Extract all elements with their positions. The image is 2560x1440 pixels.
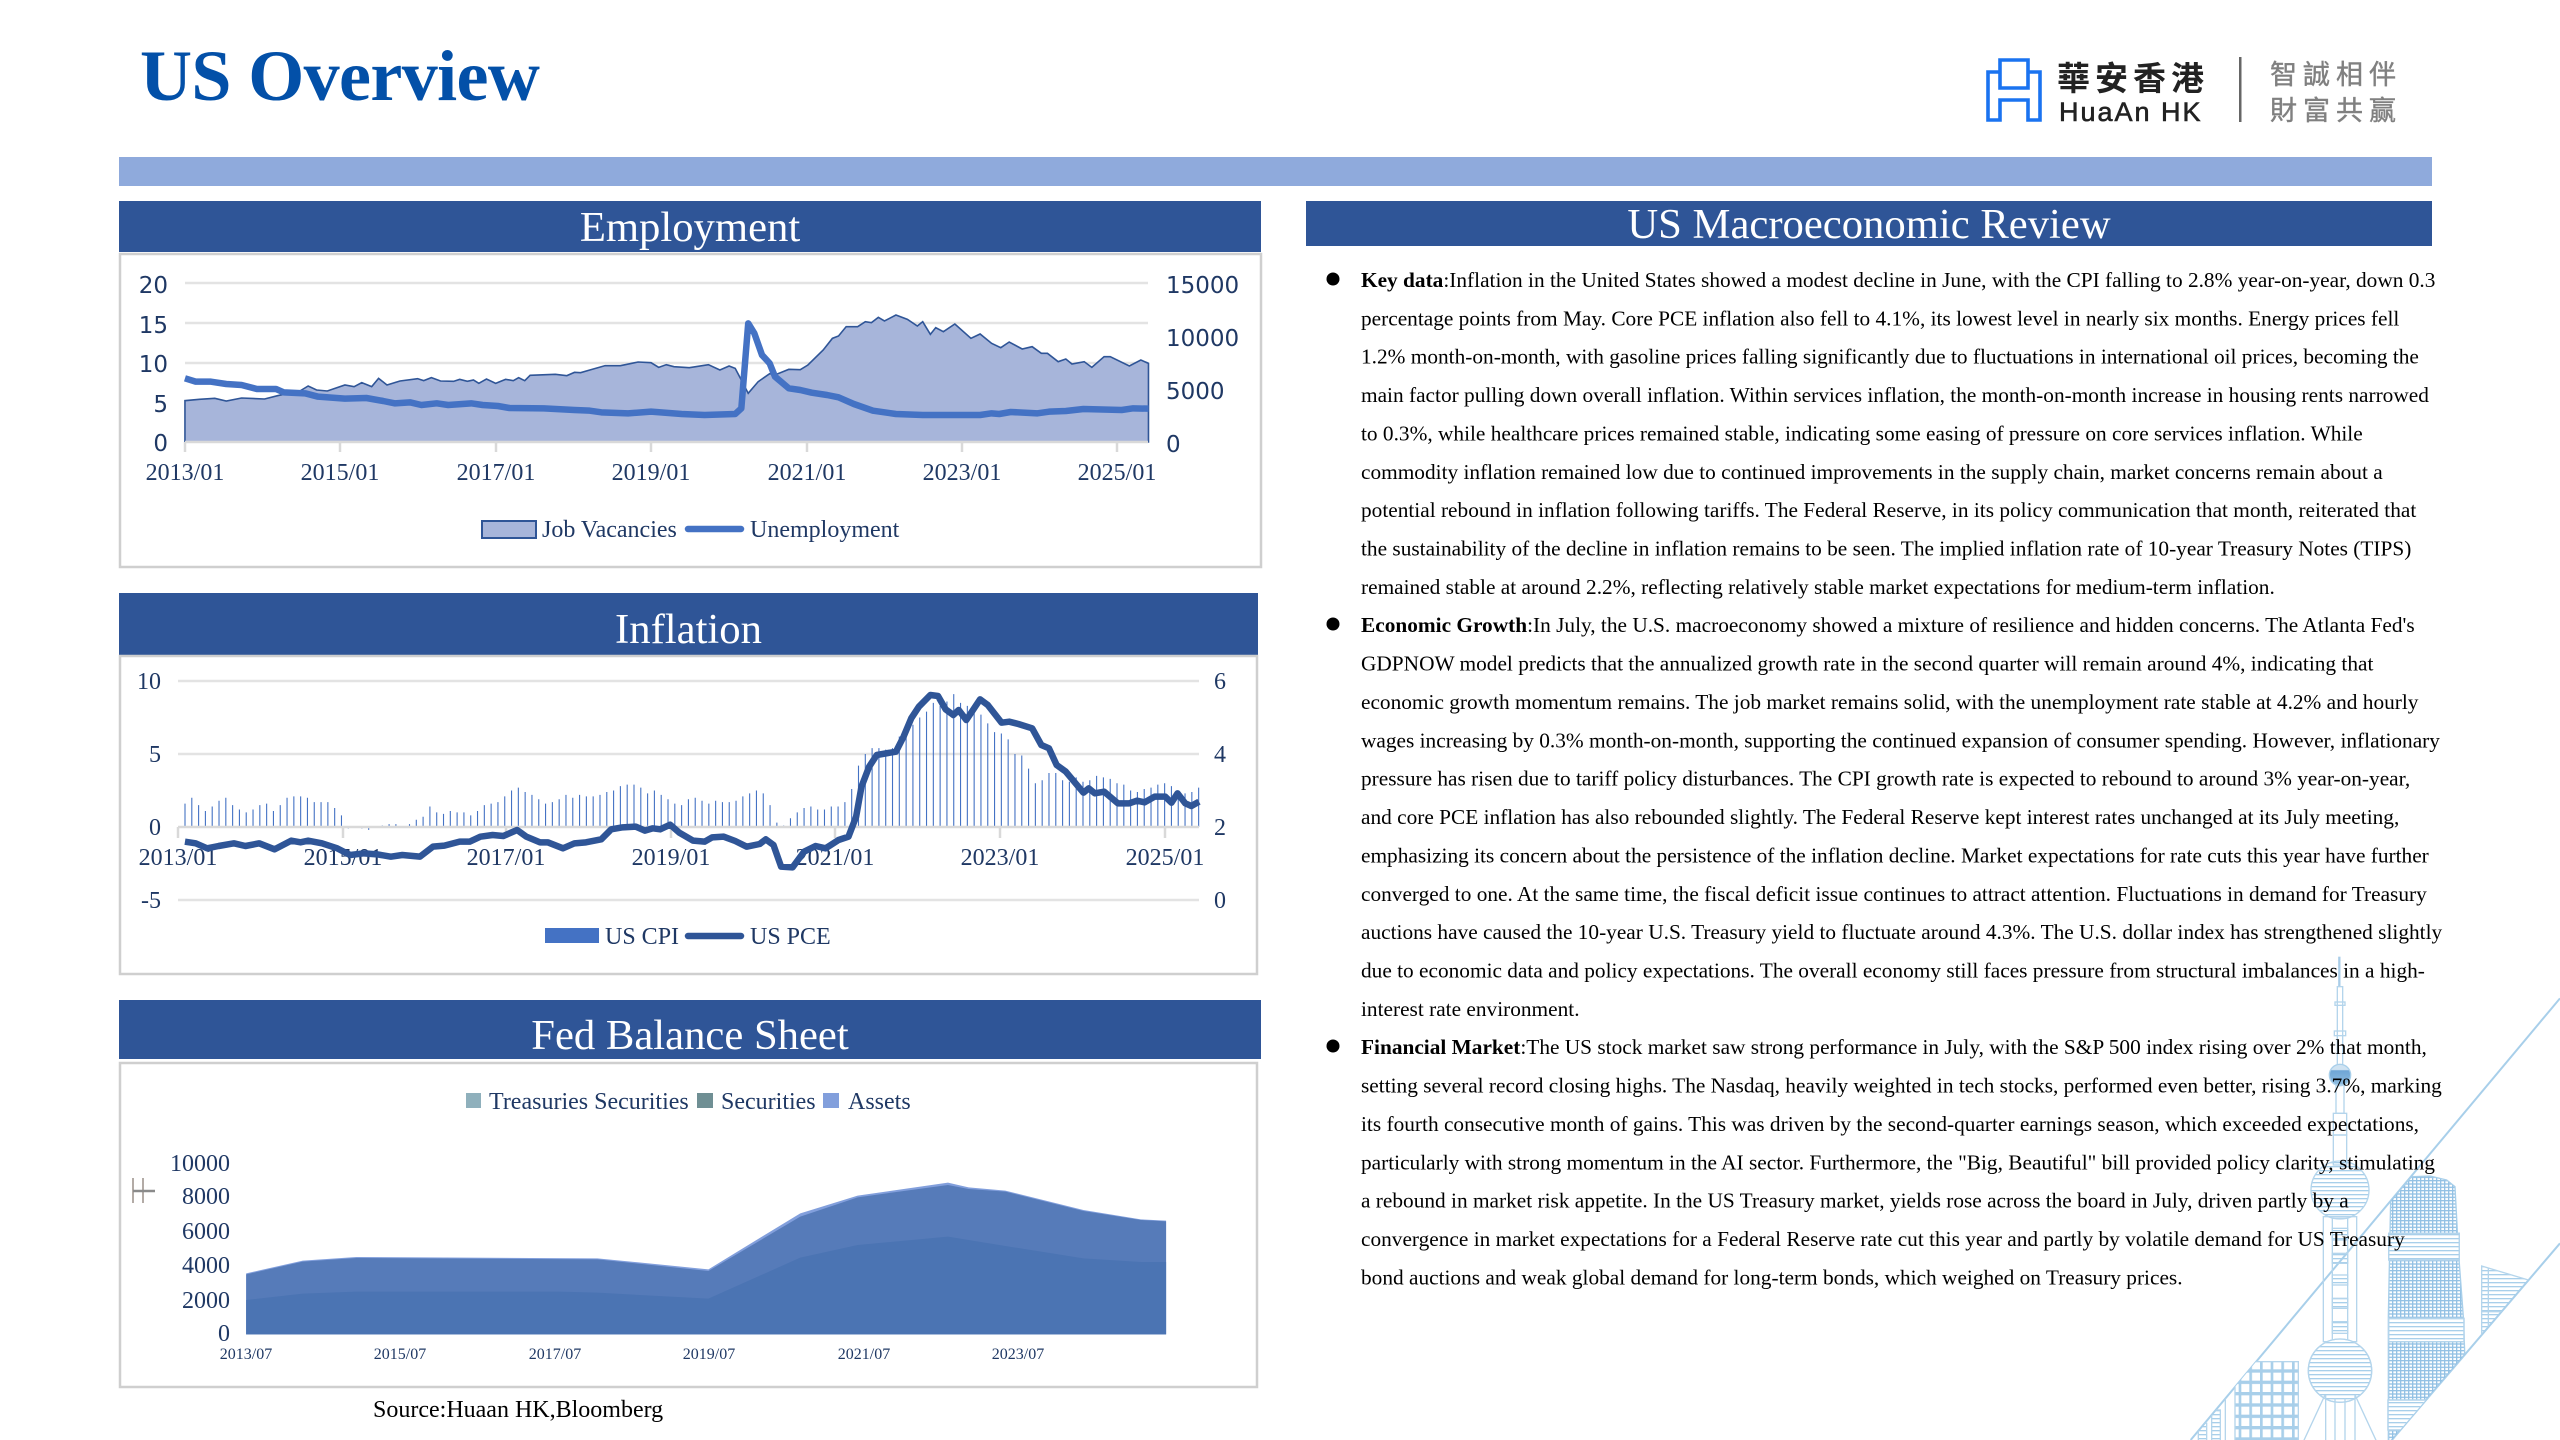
fed y axis: 8000 [182,1184,230,1210]
title: US Overview [140,36,540,116]
inflation x axis labels: 2013/01 [139,845,217,871]
paragraph: key data: potential rebound in inflation following tariffs. The Federal Reserve, in its policy communication that month, reiterated that [1361,498,2416,522]
bullet: key data [1326,272,1340,286]
employment heading [119,201,1261,252]
paragraph: key data: commodity inflation remained low due to continued improvements in the supply chain, market concerns remain about a [1361,460,2383,484]
icon: logo mark [1988,60,2040,120]
paragraph: financial market: bond auctions and weak global demand for long-term bonds, which weighed on Treasury prices. [1361,1265,2183,1289]
fed y axis: 4000 [182,1253,230,1279]
employment x axis labels: 2015/01 [301,460,379,486]
fed x axis labels: 2023/07 [992,1346,1044,1363]
employment right axis: 5000 [1166,379,1225,405]
fed legend [466,1089,911,1115]
inflation legend [545,924,831,950]
panel: Fed Balance Sheet [119,1000,1261,1387]
paragraph: economic growth: emphasizing its concern about the persistence of the inflation decline. Market expectations for rate cuts this year have further [1361,843,2429,867]
inflation heading [119,593,1258,655]
paragraph: economic growth: auctions have caused the 10-year U.S. Treasury yield to fluctuate around 4.3%. The U.S. dollar index has strengthened slightly [1361,920,2443,944]
inflation legend: US PCE [750,924,831,950]
employment left axis: 5 [153,392,168,418]
paragraph: key data: the sustainability of the decline in inflation remains to be seen. The implied inflation rate of 10-year Treasury Notes (TIPS) [1361,536,2411,560]
employment left axis: 15 [139,313,168,339]
small axis mark bar [133,1190,155,1192]
paragraph: key data [1361,268,2435,599]
paragraph: key data: remained stable at around 2.2%, reflecting relatively stable market expectations for medium-term inflation. [1361,575,2275,599]
paragraph: financial market: convergence in market expectations for a Federal Reserve rate cut this year and partly by volatile demand for US Treasury [1361,1227,2405,1251]
paragraph: financial market: particularly with strong momentum in the AI sector. Furthermore, the "Big, Beautiful" bill provided policy clarity, stimulating [1361,1150,2435,1174]
paragraph: economic growth: interest rate environment. [1361,997,1580,1021]
inflation left axis [137,669,161,914]
paragraph: key data: to 0.3%, while healthcare prices remained stable, indicating some easing of pressure on core services inflation. While [1361,421,2363,445]
paragraph: economic growth: converged to one. At the same time, the fiscal deficit issue continues to attract attention. Fluctuations in demand for Treasury [1361,882,2427,906]
logo slogan line 1: 智誠相伴 [2270,53,2402,92]
fed x axis labels: 2017/07 [529,1346,581,1363]
employment x axis labels [146,460,1156,486]
paragraph: economic growth: and core PCE inflation has also rebounded slightly. The Federal Reserve kept interest rates unchanged at its July meeting, [1361,805,2399,829]
line: US PCE [185,695,1199,867]
inflation right axis: 0 [1214,888,1226,914]
inflation right axis: 2 [1214,815,1226,841]
paragraph: financial market: Financial Market:The US stock market saw strong performance in July, with the S&P 500 index rising over 2% that month, [1361,1035,2427,1059]
logo Chinese name: 華安香港 [2057,52,2209,100]
inflation x axis labels [139,845,1204,871]
fed y axis: 0 [218,1321,230,1347]
fed balance sheet heading [119,1000,1261,1059]
paragraph: economic growth: GDPNOW model predicts that the annualized growth rate in the second quarter will remain around 4%, indicating that [1361,652,2373,676]
inflation x axis labels: 2025/01 [1126,845,1204,871]
employment x axis labels: 2025/01 [1078,460,1156,486]
small axis mark icon [133,1178,143,1203]
paragraph: financial market: setting several record closing highs. The Nasdaq, heavily weighted in tech stocks, performed even better, rising 3.7%, marking [1361,1074,2442,1098]
source note: Source:Huaan HK,Bloomberg [373,1397,663,1423]
paragraph: economic growth: economic growth momentum remains. The job market remains solid, with the unemployment rate stable at 4.2% and hourly [1361,690,2419,714]
fed balance sheet heading: Fed Balance Sheet [531,1012,849,1059]
fed x axis labels [220,1346,1044,1363]
paragraph: economic growth: pressure has risen due to tariff policy disturbances. The CPI growth rate is expected to rebound to around 3% year-on-year, [1361,767,2410,791]
employment legend: Job Vacancies [542,517,677,543]
review heading: US Macroeconomic Review [1627,201,2111,248]
employment left axis: 10 [139,352,168,378]
paragraph: financial market: a rebound in market risk appetite. In the US Treasury market, yields rose across the board in July, driven partly by a [1361,1189,2349,1213]
fed y axis: 10000 [170,1151,230,1177]
inflation x axis labels: 2017/01 [467,845,545,871]
bars: US CPI [185,694,1199,830]
inflation x axis labels: 2023/01 [961,845,1039,871]
employment x axis labels: 2019/01 [612,460,690,486]
panel: Employment [119,201,1261,567]
employment left axis: 0 [153,431,168,457]
logo English name: HuaAn HK [2059,97,2203,127]
logo slogan line 2: 財富共赢 [2270,89,2402,128]
paragraph: financial market: its fourth consecutive month of gains. This was driven by the second-quarter earnings season, which exceeded expectations, [1361,1112,2419,1136]
employment x axis labels: 2023/01 [923,460,1001,486]
employment right axis: 10000 [1166,326,1239,352]
employment x axis labels: 2021/01 [768,460,846,486]
inflation right axis: 4 [1214,742,1226,768]
fed x axis labels: 2021/07 [838,1346,890,1363]
employment right axis: 0 [1166,432,1181,458]
fed legend: Securities [721,1089,816,1115]
fed y axis: 2000 [182,1288,230,1314]
fed x axis labels: 2013/07 [220,1346,272,1363]
employment right axis: 15000 [1166,273,1239,299]
stacked areas: fed balance sheet [246,1183,1166,1334]
employment heading: Employment [580,204,800,251]
header band [119,157,2432,186]
fed y axis: 6000 [182,1219,230,1245]
employment x axis labels: 2013/01 [146,460,224,486]
paragraph: economic growth: Economic Growth:In July, the U.S. macroeconomy showed a mixture of resilience and hidden concerns. The Atlanta Fed's [1361,613,2415,637]
employment x axis labels: 2017/01 [457,460,535,486]
area: job vacancies [185,315,1148,442]
employment legend: Unemployment [750,517,900,543]
paragraph: financial market [1361,1035,2442,1289]
inflation left axis: 10 [137,669,161,695]
inflation right axis [1214,669,1226,914]
logo: HuaAn HK [1988,52,2402,128]
paragraph: economic growth: due to economic data and policy expectations. The overall economy still faces pressure from structural imbalances in a high- [1361,958,2425,982]
bullet: economic growth [1326,618,1340,630]
review heading [1306,201,2432,248]
panel: Inflation [119,593,1258,974]
inflation heading: Inflation [615,606,762,653]
inflation x axis labels: 2015/01 [304,845,382,871]
employment left axis: 20 [139,273,168,299]
inflation x axis labels: 2019/01 [632,845,710,871]
logo divider [2239,57,2242,122]
fed x axis labels: 2019/07 [683,1346,735,1363]
inflation right axis: 6 [1214,669,1226,695]
inflation left axis: 0 [149,815,161,841]
paragraph: economic growth [1361,613,2443,1021]
decorative skyline: Shanghai towers [2191,957,2560,1440]
employment legend [482,517,900,543]
inflation left axis: -5 [141,888,161,914]
paragraph: key data: main factor pulling down overall inflation. Within services inflation, the month-on-month increase in housing rents narrowed [1361,383,2429,407]
paragraph: economic growth: wages increasing by 0.3% month-on-month, supporting the continued expansion of consumer spending. However, inflationary [1361,728,2440,752]
panel: US Macroeconomic Review [1306,201,2443,1289]
employment left axis [139,273,168,457]
review text block [1326,268,2443,1289]
line: unemployment [185,323,1148,415]
fed y axis [170,1151,230,1347]
inflation legend: US CPI [605,924,679,950]
inflation left axis: 5 [149,742,161,768]
paragraph: key data: 1.2% month-on-month, with gasoline prices falling significantly due to fluctuations in international oil prices, becoming the [1361,345,2419,369]
bullet: financial market [1326,1040,1340,1052]
fed x axis labels: 2015/07 [374,1346,426,1363]
paragraph: key data: percentage points from May. Core PCE inflation also fell to 4.1%, its lowest level in nearly six months. Energy prices fell [1361,306,2399,330]
inflation x axis labels: 2021/01 [796,845,874,871]
employment right axis [1166,273,1239,458]
paragraph: key data: Key data:Inflation in the United States showed a modest decline in June, with the CPI falling to 2.8% year-on-year, down 0.3 [1361,268,2435,292]
fed legend: Assets [848,1089,911,1115]
fed legend: Treasuries Securities [489,1089,689,1115]
